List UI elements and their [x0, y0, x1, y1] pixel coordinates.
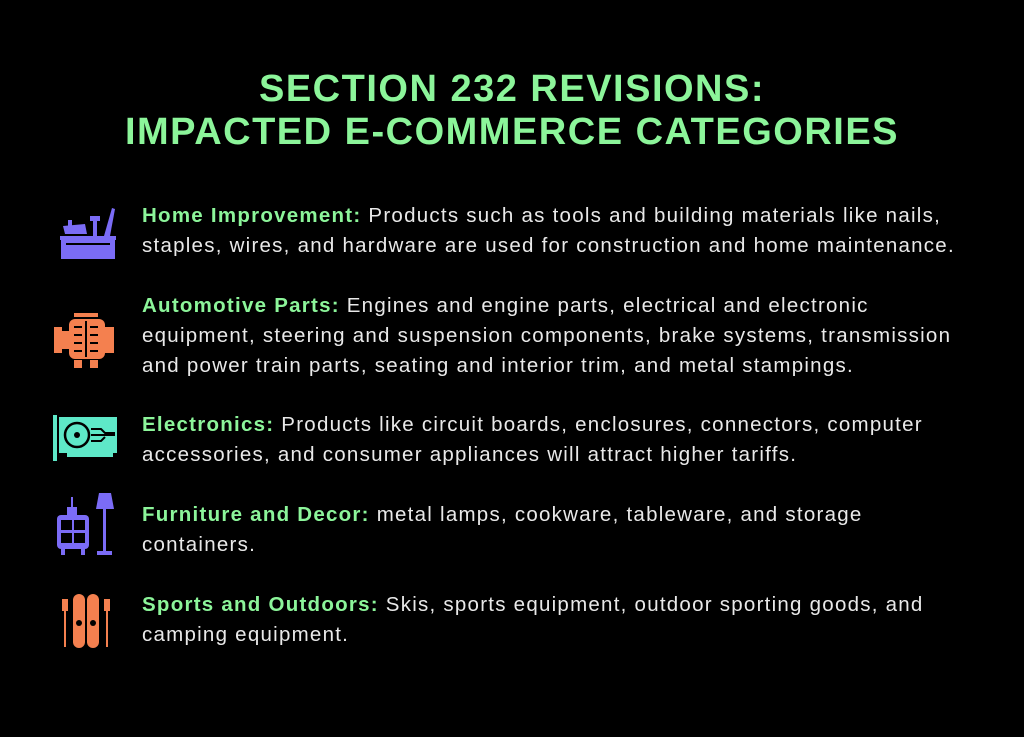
- icon: engine: [54, 313, 114, 368]
- icon: skis: [62, 594, 110, 648]
- text: furniture and decor: Furniture and Decor: metal lamps, cookware, tableware, and storage: [142, 503, 863, 526]
- icon: graphics card: [53, 415, 117, 461]
- text: electronics: accessories, and consumer appliances will attract higher tariffs.: [142, 443, 797, 466]
- text: automotive parts: and power train parts, seating and interior trim, and metal stampings.: [142, 354, 854, 377]
- text: sports and outdoors: [142, 593, 924, 646]
- text: automotive parts: [142, 294, 951, 377]
- text: home improvement: [142, 204, 955, 257]
- text: home improvement: staples, wires, and hardware are used for construction and home maintenance.: [142, 234, 955, 257]
- text: furniture and decor: containers.: [142, 533, 256, 556]
- text: furniture and decor: [142, 503, 863, 556]
- text: automotive parts: Automotive Parts: Engines and engine parts, electrical and electronic: [142, 294, 869, 317]
- text: home improvement: Home Improvement: Products such as tools and building materials like nails,: [142, 204, 941, 227]
- text: sports and outdoors: camping equipment.: [142, 623, 349, 646]
- text: sports and outdoors: Sports and Outdoors: Skis, sports equipment, outdoor sporting goods, and: [142, 593, 924, 616]
- title: IMPACTED E-COMMERCE CATEGORIES: [125, 111, 899, 153]
- text: electronics: Electronics: Products like circuit boards, enclosures, connectors, computer: [142, 413, 923, 436]
- title: [125, 68, 899, 153]
- icon: furniture and lamp: [57, 493, 114, 555]
- text: automotive parts: equipment, steering and suspension components, brake systems, transmission: [142, 324, 951, 347]
- text: electronics: [142, 413, 923, 466]
- icon: toolbox: [60, 208, 116, 259]
- title: SECTION 232 REVISIONS:: [259, 68, 765, 110]
